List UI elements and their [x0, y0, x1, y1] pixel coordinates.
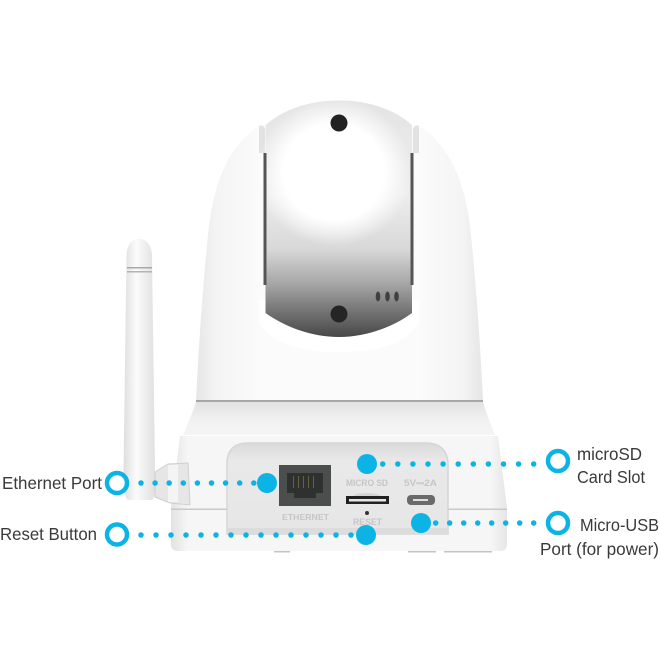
micro sd label: MICRO SD	[346, 478, 388, 488]
top lens	[330, 114, 348, 132]
label: Ethernet Port	[2, 473, 102, 493]
target dot	[257, 473, 277, 493]
micro sd slot	[346, 496, 389, 504]
port panel	[227, 443, 448, 534]
label: Reset Button	[0, 524, 97, 544]
head side slot right	[410, 153, 414, 285]
callout: microsd card slot: Card Slot	[577, 467, 645, 487]
ethernet port	[279, 465, 331, 506]
target dot	[356, 525, 376, 545]
head highlight	[256, 98, 412, 246]
ring	[107, 524, 127, 544]
micro sd slot hump	[353, 493, 381, 501]
camera head face	[256, 98, 414, 337]
ring	[548, 513, 568, 533]
callout: ethernet port	[2, 473, 277, 493]
callout: micro-usb port	[411, 513, 659, 559]
base seam	[171, 508, 507, 510]
dotted leader	[383, 461, 535, 467]
dotted leader	[141, 480, 254, 486]
reset hole	[365, 511, 369, 515]
target dot	[411, 513, 431, 533]
head ear tab right	[413, 126, 419, 153]
label: microSD	[577, 444, 642, 464]
camera head recess	[259, 300, 419, 352]
micro usb port	[407, 495, 435, 505]
callout: micro-usb port: Port (for power)	[540, 539, 659, 559]
body seam	[196, 400, 483, 402]
head ear tab left	[259, 126, 265, 153]
ethernet label: ETHERNET	[282, 512, 330, 522]
collar	[183, 402, 495, 435]
dotted leader	[436, 520, 536, 526]
antenna hinge	[155, 463, 190, 505]
base	[171, 436, 507, 551]
head side slot left	[264, 153, 266, 285]
antenna	[124, 239, 155, 500]
camera body dome	[196, 125, 483, 401]
three indicator holes	[376, 292, 399, 302]
target dot	[357, 454, 377, 474]
reset label: RESET	[353, 517, 382, 527]
callout: microsd card slot	[357, 444, 645, 487]
bottom lens	[330, 306, 348, 322]
ring	[548, 451, 568, 471]
dotted leader	[141, 532, 352, 538]
feet	[274, 551, 492, 552]
ring	[107, 473, 127, 493]
power label: 5V⎓2A	[404, 478, 438, 488]
callout: reset button	[0, 524, 376, 545]
